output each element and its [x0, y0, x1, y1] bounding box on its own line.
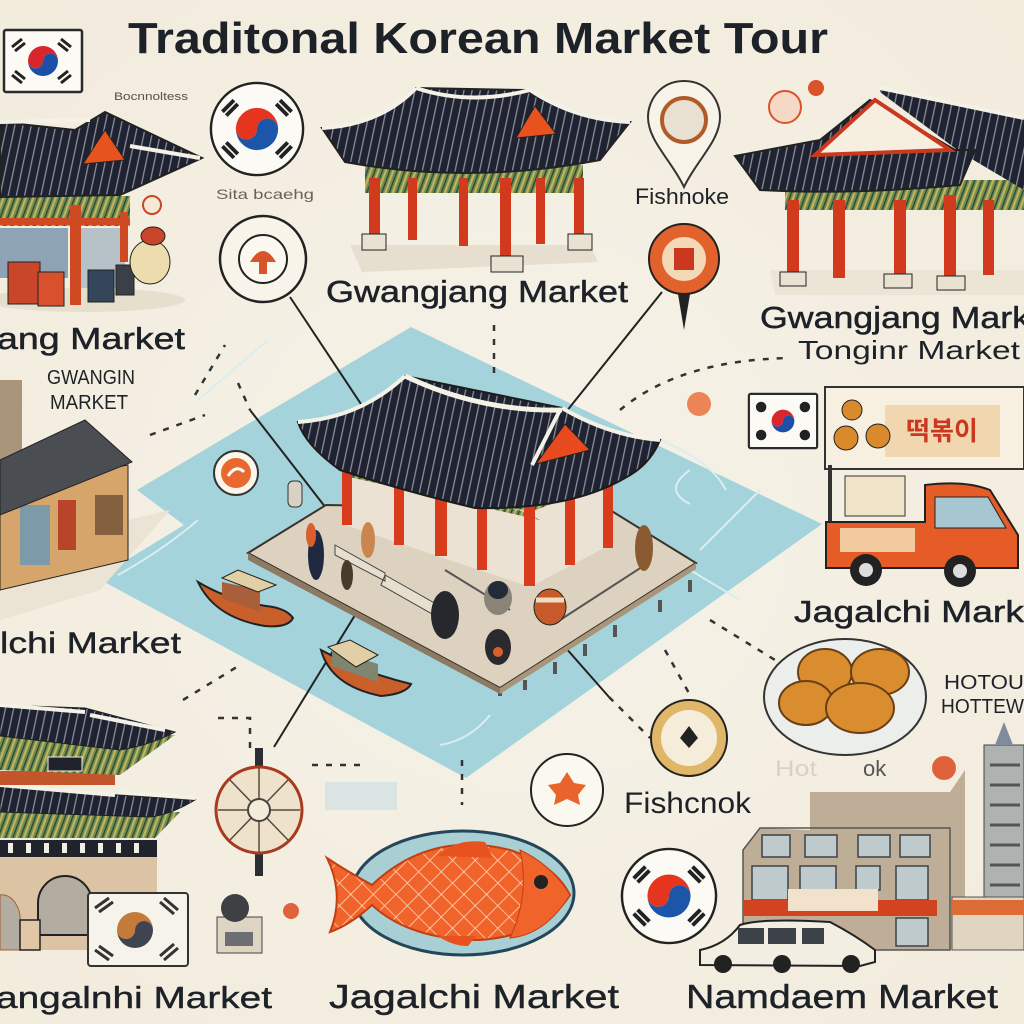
icon: small stone lantern [217, 894, 262, 953]
food truck: 떡볶이 [906, 416, 978, 446]
icon: hotteok circle [651, 700, 727, 776]
building: hotel right [743, 722, 1024, 950]
icon: plate of hotteok [764, 639, 926, 755]
label: lchi Market left: lchi Market [0, 627, 182, 660]
label: Fishnoke: Fishnoke [635, 184, 729, 209]
figures on platform [306, 522, 653, 665]
pavilion: top centre [322, 88, 630, 272]
icon: map pin top [648, 81, 720, 187]
map: water area [97, 327, 822, 778]
building: left shop [0, 380, 170, 620]
icon: fish plate [327, 831, 574, 955]
food truck [825, 387, 1024, 587]
label: angalnhi Market: angalnhi Market [0, 980, 272, 1015]
label: Hotou Hottew [941, 672, 1024, 718]
label: gang Market left: ang Market [0, 321, 185, 356]
caption: small label: Sita bcaehg [216, 186, 314, 202]
label: Gwangjang Market top centre: Gwangjang Market [326, 274, 628, 309]
icon: orange circle left [214, 451, 258, 495]
icon: car [700, 921, 875, 973]
label: Gwangjang Mark: Gwangjang Mark [760, 300, 1024, 335]
icon: flag circle top [211, 83, 303, 175]
icon: orange pin [649, 224, 719, 330]
icon: compass circle [216, 748, 302, 876]
pavilion: top right [735, 80, 1024, 295]
label: Gwangin Market: GWANGIN [47, 367, 135, 389]
label: faded hot: Hot [775, 756, 817, 781]
label: Hotou Hottew: HOTOU [944, 672, 1024, 694]
label: Fishchok: Fishcnok [624, 787, 752, 820]
pale panel [325, 782, 397, 810]
pavilion: top left market [0, 112, 202, 312]
label: Tonginr Market: Tonginr Market [798, 335, 1021, 365]
boat left [198, 570, 293, 626]
icon: red circle pin [220, 216, 306, 302]
boat bottom [321, 640, 411, 696]
label: ok: ok [863, 756, 887, 781]
label: Gwangin Market [47, 367, 135, 414]
icon: flower circle [531, 754, 603, 826]
label: Jagalchi Market: Jagalchi Market [329, 978, 619, 1015]
icon: flag top left [4, 30, 82, 92]
icon: flag bottom left [88, 893, 188, 966]
connector lines to centre [250, 292, 662, 747]
caption: small text top left: Bocnnoltess [114, 91, 189, 103]
icon: orange flower right of map [687, 392, 711, 416]
label: Jagalchi Mark right: Jagalchi Mark [794, 594, 1024, 629]
label: Namdaem Market: Namdaem Market [686, 978, 998, 1015]
dashed route lines [150, 325, 790, 805]
central pavilion [298, 376, 660, 586]
title: Traditonal Korean Market Tour [128, 14, 828, 63]
icon: small lantern [288, 481, 302, 507]
central platform [248, 470, 696, 696]
icon: flag circle bottom [622, 849, 716, 943]
icon: flag right [749, 394, 817, 448]
icon: red dot [283, 903, 299, 919]
pavilion: bottom left gate [0, 705, 195, 950]
label: Gwangin Market: MARKET [50, 392, 128, 414]
